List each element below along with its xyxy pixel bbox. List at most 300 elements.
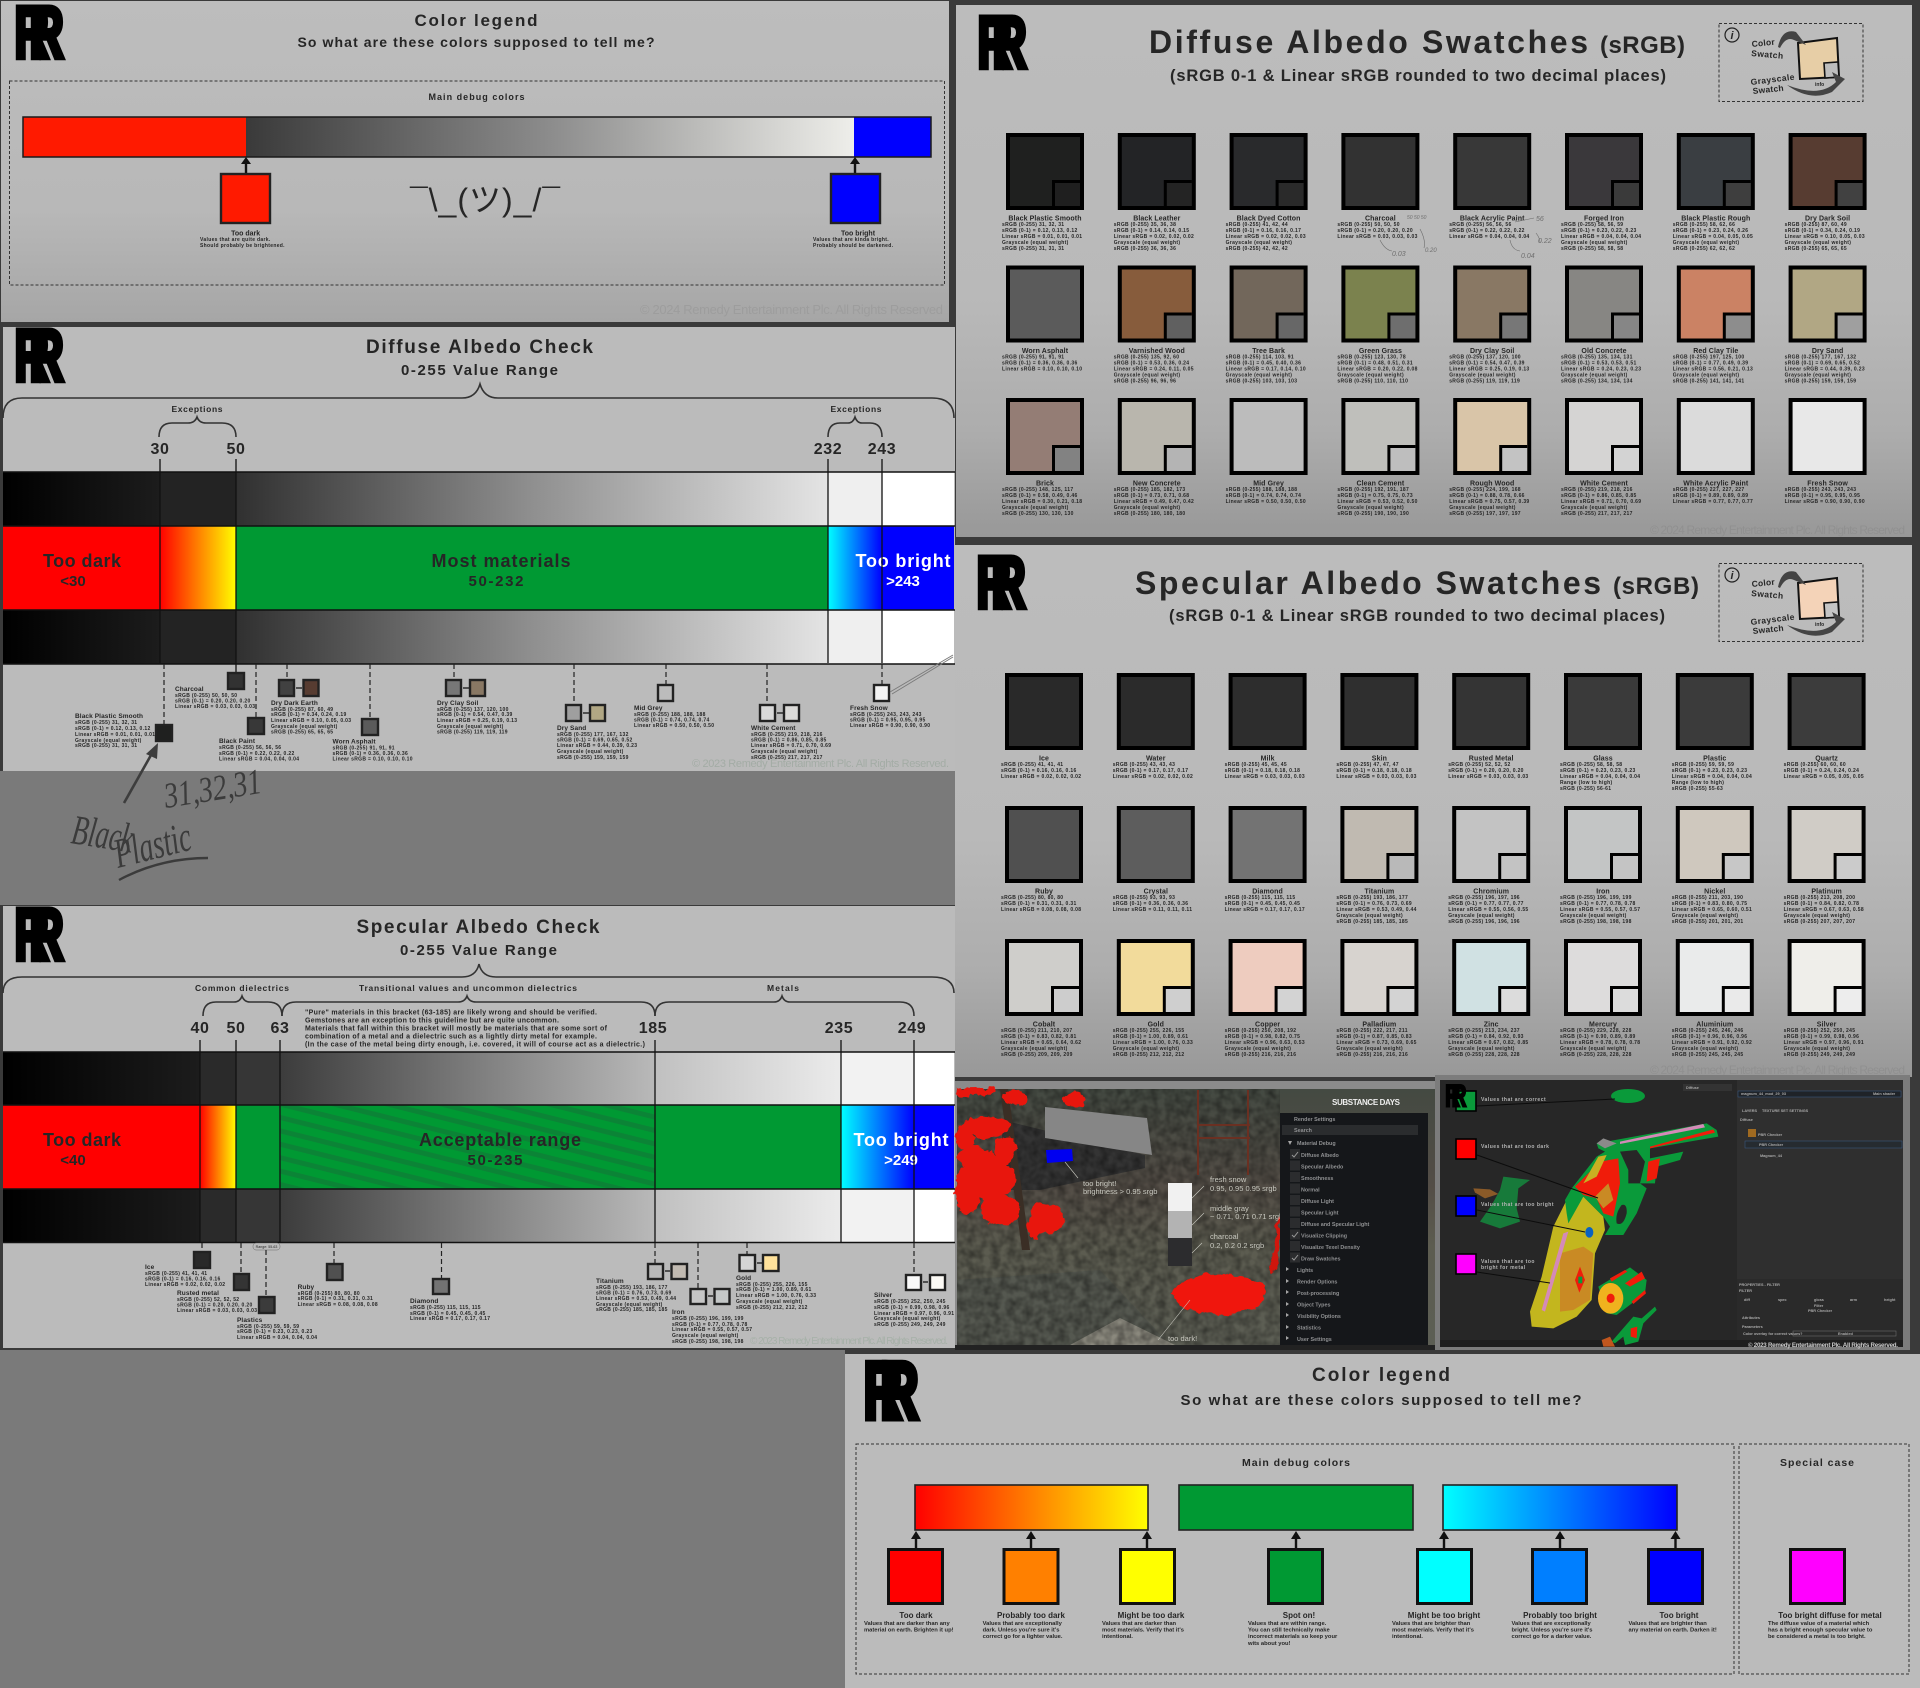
callout: fresh snow: sRGB (0-1) = 0.95, 0.95, 0.95	[850, 717, 926, 723]
callout: silver: Grayscale (equal weight)	[874, 1316, 941, 1322]
threshold numbers: 63	[270, 1020, 290, 1037]
callout: iron: sRGB (0-255) 198, 198, 198	[672, 1339, 744, 1345]
swatch: rough wood: Linear sRGB = 0.75, 0.57, 0.39	[1449, 499, 1530, 505]
handwritten notes on charcoal and acrylic: 0.04	[1521, 253, 1535, 260]
exceptions right: Exceptions	[830, 404, 882, 414]
swatch: fresh snow	[1785, 398, 1867, 505]
callout: white cement: sRGB (0-1) = 0.86, 0.85, 0.85	[751, 738, 827, 744]
arrows	[911, 1531, 1680, 1548]
copyright: © 2023 Remedy Entertainment Plc. All Rights Reserved.	[692, 758, 949, 770]
swatch: green grass: sRGB (0-1) = 0.48, 0.51, 0.31	[1337, 360, 1413, 366]
item: probably too dark: Values that are exceptionally	[983, 1621, 1063, 1627]
swatch: tree bark: Linear sRGB = 0.17, 0.14, 0.10	[1226, 366, 1306, 372]
brand label: SUBSTANCE DAYS	[1332, 1098, 1401, 1107]
swatch: mid grey: sRGB (0-255) 188, 188, 188	[1226, 487, 1297, 493]
swatch: glass: sRGB (0-1) = 0.23, 0.23, 0.23	[1560, 768, 1636, 774]
swatch: ruby: Linear sRGB = 0.08, 0.08, 0.08	[1001, 907, 1081, 913]
swatch: black acrylic paint	[1449, 133, 1531, 240]
swatch: zinc: Zinc	[1484, 1022, 1499, 1028]
swatch: dry sand: sRGB (0-1) = 0.69, 0.65, 0.52	[1785, 360, 1860, 366]
swatch: forged iron: Forged Iron	[1584, 216, 1624, 222]
callout: fresh snow	[850, 655, 953, 729]
callout: fresh snow: Linear sRGB = 0.90, 0.90, 0.90	[850, 723, 930, 729]
item: spot on: wits about you!	[1247, 1641, 1291, 1647]
callout: rusted metal: Linear sRGB = 0.03, 0.03, 0.03	[177, 1308, 257, 1314]
swatch: old concrete: Old Concrete	[1581, 348, 1627, 355]
label: too dark: Too dark	[43, 1130, 122, 1150]
swatch: aluminium	[1672, 939, 1754, 1058]
render settings panel: Lights	[1297, 1268, 1313, 1274]
swatch: varnished wood: sRGB (0-255) 135, 92, 60	[1114, 354, 1179, 360]
swatch: dry dark soil	[1785, 133, 1867, 252]
swatch: old concrete: sRGB (0-255) 134, 134, 134	[1561, 378, 1633, 384]
swatch: ruby: sRGB (0-1) = 0.31, 0.31, 0.31	[1001, 901, 1077, 907]
swatch: too bright	[813, 157, 894, 249]
swatch: black acrylic paint: sRGB (0-255) 56, 56, 56	[1449, 222, 1512, 228]
swatch: black plastic smooth: Grayscale (equal weight)	[1002, 240, 1069, 246]
panel: color legend detailed	[845, 1343, 1920, 1688]
swatch: plastic: Linear sRGB = 0.04, 0.04, 0.04	[1672, 774, 1752, 780]
swatch: black plastic rough: Grayscale (equal weight)	[1673, 240, 1739, 246]
swatch: dry sand: sRGB (0-255) 177, 167, 132	[1785, 354, 1856, 360]
swatch: white cement: sRGB (0-255) 219, 218, 216	[1561, 487, 1633, 493]
swatch: cobalt: sRGB (0-255) 209, 209, 209	[1001, 1052, 1073, 1058]
legend: correct: Values that are correct	[1481, 1097, 1546, 1103]
swatch: rusted metal	[1448, 673, 1530, 780]
swatch: worn asphalt: sRGB (0-255) 91, 91, 91	[1002, 354, 1064, 360]
callout: charcoal: sRGB (0-255) 50, 50, 50	[175, 693, 237, 699]
swatch: brick: sRGB (0-1) = 0.58, 0.49, 0.46	[1002, 493, 1078, 499]
layers panel: TEXTURE SET SETTINGS	[1762, 1109, 1809, 1113]
callout: black plastic smooth: sRGB (0-255) 31, 31, 31	[75, 743, 137, 749]
swatch: quartz: sRGB (0-255) 60, 60, 60	[1784, 762, 1846, 768]
callout: ruby: Linear sRGB = 0.08, 0.08, 0.08	[298, 1302, 378, 1308]
swatch: platinum: sRGB (0-255) 207, 207, 207	[1784, 919, 1855, 925]
swatch: cobalt	[1001, 939, 1083, 1058]
item: spot on: incorrect materials so keep your	[1248, 1634, 1338, 1640]
swatch: black plastic smooth: sRGB (0-255) 31, 32, 31	[1002, 222, 1064, 228]
render settings panel: Diffuse Albedo	[1301, 1153, 1340, 1159]
callout: gold: sRGB (0-255) 212, 212, 212	[736, 1305, 808, 1311]
swatch: skin	[1336, 673, 1418, 780]
swatch: milk: Linear sRGB = 0.03, 0.03, 0.03	[1225, 774, 1305, 780]
swatch: black leather: sRGB (0-255) 35, 36, 38	[1114, 222, 1176, 228]
swatch: forged iron: Linear sRGB = 0.04, 0.04, 0.04	[1561, 234, 1641, 240]
swatch: brick	[1002, 398, 1084, 517]
swatch grid	[1001, 673, 1866, 1058]
red accents	[1575, 1158, 1620, 1217]
render settings panel: Specular Albedo	[1301, 1164, 1344, 1170]
swatch: palladium: sRGB (0-255) 216, 216, 216	[1336, 1052, 1408, 1058]
item: might be too bright: Values that are brighter than	[1392, 1621, 1471, 1627]
swatch: white acrylic paint	[1673, 398, 1755, 505]
top gray ramp	[3, 472, 954, 526]
info box: Swatch	[1752, 83, 1784, 96]
threshold numbers: 50	[226, 441, 246, 458]
callout: diamond: Linear sRGB = 0.17, 0.17, 0.17	[410, 1316, 490, 1322]
swatch: gold: sRGB (0-255) 255, 226, 155	[1113, 1028, 1185, 1034]
callout: dry sand: Linear sRGB = 0.44, 0.39, 0.23	[557, 743, 637, 749]
swatch: silver: sRGB (0-1) = 0.99, 0.98, 0.96	[1784, 1034, 1859, 1040]
render settings panel: Diffuse Light	[1301, 1199, 1334, 1205]
callout: dry clay soil: sRGB (0-1) = 0.54, 0.47, 0.39	[437, 712, 513, 718]
callout: black plastic smooth: Linear sRGB = 0.01, 0.01, 0.01	[75, 732, 155, 738]
swatch: aluminium: sRGB (0-1) = 0.96, 0.96, 0.96	[1672, 1034, 1747, 1040]
callout: charcoal: Linear sRGB = 0.03, 0.03, 0.03	[175, 704, 255, 710]
label: too bright range: >249	[884, 1152, 918, 1169]
swatch: ruby: sRGB (0-255) 80, 80, 80	[1001, 895, 1063, 901]
threshold numbers: 243	[868, 441, 896, 458]
label: too dark range: <30	[60, 573, 86, 590]
callout: black plastic smooth: sRGB (0-255) 31, 32, 31	[75, 720, 137, 726]
callout: dry clay soil	[437, 664, 517, 736]
info box: info	[1815, 82, 1824, 88]
background: gray filler lower left	[0, 771, 955, 905]
swatch: new concrete: New Concrete	[1133, 480, 1181, 488]
callout: mid grey: sRGB (0-255) 188, 188, 188	[634, 712, 706, 718]
callout: plastics	[237, 1243, 317, 1341]
swatch: new concrete: sRGB (0-1) = 0.73, 0.71, 0.68	[1114, 493, 1189, 499]
logo: R	[976, 542, 1011, 625]
dashed box: main	[856, 1444, 1734, 1674]
swatch: milk: Milk	[1261, 756, 1275, 762]
label: too bright: Too bright	[856, 551, 950, 571]
swatch: dry dark soil: Dry Dark Soil	[1805, 216, 1850, 222]
threshold numbers: 232	[814, 441, 842, 458]
item: too dark: material on earth. Brighten it up!	[864, 1628, 954, 1634]
swatch: cobalt: sRGB (0-1) = 0.83, 0.82, 0.81	[1001, 1034, 1077, 1040]
swatch: dry clay soil	[1449, 266, 1531, 384]
swatch: tree bark: sRGB (0-255) 103, 103, 103	[1226, 378, 1297, 384]
swatch: cobalt: Grayscale (equal weight)	[1001, 1046, 1068, 1052]
swatch: too dark: Values that are quite dark.	[200, 237, 271, 243]
callout: plastics: Range: 55-63	[256, 1245, 277, 1249]
info box: Color	[1751, 577, 1776, 589]
subheading: (sRGB 0-1 & Linear sRGB rounded to two decimal places)	[1170, 67, 1666, 85]
layers panel: arm	[1850, 1298, 1858, 1302]
swatch: mid grey: Linear sRGB = 0.50, 0.50, 0.50	[1226, 499, 1306, 505]
heading suffix: (sRGB)	[1600, 32, 1685, 59]
swatch: gold: Grayscale (equal weight)	[1113, 1046, 1179, 1052]
item: probably too bright	[1512, 1550, 1597, 1640]
callout: worn asphalt: Worn Asphalt	[332, 739, 376, 746]
viewport dropdown	[1683, 1084, 1732, 1091]
swatch: green grass: sRGB (0-255) 123, 130, 78	[1337, 354, 1406, 360]
render settings panel: User Settings	[1297, 1337, 1332, 1343]
dark road	[1002, 1120, 1145, 1190]
swatch: silver	[1784, 939, 1866, 1058]
callout: plastics: sRGB (0-255) 59, 59, 59	[237, 1324, 299, 1330]
scene grain	[957, 1089, 1280, 1345]
layers panel: Parameters	[1742, 1325, 1763, 1329]
info box	[1719, 564, 1863, 642]
swatch: milk: sRGB (0-255) 45, 45, 45	[1225, 762, 1287, 768]
swatch: charcoal: sRGB (0-1) = 0.20, 0.20, 0.20	[1337, 228, 1413, 234]
render settings panel: Normal	[1301, 1188, 1320, 1194]
swatch: crystal: sRGB (0-1) = 0.36, 0.36, 0.36	[1113, 901, 1188, 907]
red clipping: foliage	[955, 1087, 1087, 1238]
callout: iron: Grayscale (equal weight)	[672, 1333, 739, 1339]
exceptions left	[159, 404, 236, 437]
ejector rod	[1612, 1307, 1657, 1345]
callout: dry dark earth: sRGB (0-1) = 0.34, 0.24, 0.19	[271, 712, 347, 718]
layers panel	[1737, 1091, 1903, 1340]
swatch: brick: Brick	[1036, 480, 1054, 488]
render settings panel: Post-processing	[1297, 1291, 1339, 1297]
callout: dry clay soil: Linear sRGB = 0.25, 0.19, 0.13	[437, 718, 517, 724]
bar: too dark range	[915, 1485, 1148, 1530]
swatch: quartz: sRGB (0-1) = 0.24, 0.24, 0.24	[1784, 768, 1859, 774]
callout: mid grey: Linear sRGB = 0.50, 0.50, 0.50	[634, 723, 714, 729]
swatch: dry dark soil: sRGB (0-1) = 0.34, 0.24, 0.19	[1785, 228, 1860, 234]
swatch: white acrylic paint: sRGB (0-1) = 0.89, 0.89, 0.89	[1673, 493, 1748, 499]
info box: Swatch	[1752, 623, 1784, 636]
swatch: ice: Linear sRGB = 0.02, 0.02, 0.02	[1001, 774, 1081, 780]
swatch: rusted metal: Rusted Metal	[1469, 756, 1514, 762]
swatch: white cement: Grayscale (equal weight)	[1561, 505, 1628, 511]
swatch: cobalt: sRGB (0-255) 211, 210, 207	[1001, 1028, 1072, 1034]
layers panel: LAYERS	[1742, 1109, 1758, 1113]
render settings panel: Smoothness	[1301, 1176, 1333, 1182]
note text: Gemstones are an exception to this guideline but are quite uncommon.	[305, 1018, 559, 1024]
swatch: charcoal: sRGB (0-255) 50, 50, 50	[1337, 222, 1400, 228]
swatch: black acrylic paint: sRGB (0-1) = 0.22, 0.22, 0.22	[1449, 228, 1525, 234]
logo small: R	[1451, 1078, 1467, 1114]
swatch: chromium: Grayscale (equal weight)	[1448, 913, 1515, 919]
callout: white cement: sRGB (0-255) 219, 218, 216	[751, 732, 823, 738]
logo small: R	[1445, 1078, 1460, 1114]
swatch: clean cement: Linear sRGB = 0.53, 0.52, 0.50	[1337, 499, 1418, 505]
swatch: black acrylic paint: Black Acrylic Paint	[1460, 216, 1525, 222]
render settings panel: Search	[1294, 1128, 1312, 1134]
stray part: hammer	[1480, 1177, 1530, 1228]
item: probably too bright: Probably too bright	[1523, 1611, 1597, 1620]
swatch: dry dark soil: sRGB (0-255) 65, 65, 65	[1785, 246, 1847, 252]
swatch: skin: sRGB (0-1) = 0.18, 0.18, 0.18	[1336, 768, 1412, 774]
swatch: plastic: sRGB (0-1) = 0.23, 0.23, 0.23	[1672, 768, 1747, 774]
scene annotations: brightness > 0.95 srgb	[1083, 1187, 1157, 1196]
swatch: charcoal: Linear sRGB = 0.03, 0.03, 0.03	[1337, 234, 1418, 240]
swatch: black plastic smooth	[1002, 133, 1084, 252]
swatch: green grass: Grayscale (equal weight)	[1337, 372, 1404, 378]
swatch: iron: sRGB (0-1) = 0.77, 0.78, 0.78	[1560, 901, 1636, 907]
swatch: dry clay soil: Grayscale (equal weight)	[1449, 372, 1516, 378]
callout: mid grey: sRGB (0-1) = 0.74, 0.74, 0.74	[634, 717, 710, 723]
scene annotations: middle gray	[1210, 1204, 1249, 1213]
scene annotations	[1065, 1162, 1283, 1343]
note text: combination of a metal and a dielectric such as a lightly dirty metal for example.	[305, 1034, 597, 1040]
item: spot on: Spot on!	[1283, 1611, 1315, 1620]
callout: mid grey	[634, 664, 714, 729]
swatch: fresh snow: Linear sRGB = 0.90, 0.90, 0.90	[1785, 499, 1865, 505]
logo: R	[992, 2, 1027, 85]
big brace	[3, 384, 954, 418]
swatch: green grass: Green Grass	[1359, 348, 1402, 355]
label: most materials range: 50-232	[468, 573, 524, 590]
info box: info	[1815, 622, 1824, 628]
swatch: black leather: sRGB (0-1) = 0.14, 0.14, 0.15	[1114, 228, 1189, 234]
panel: diffuse albedo swatches	[956, 2, 1912, 537]
swatch: forged iron: Grayscale (equal weight)	[1561, 240, 1628, 246]
handwritten notes on charcoal and acrylic	[1380, 215, 1552, 260]
swatch: dry dark soil: sRGB (0-255) 87, 60, 49	[1785, 222, 1847, 228]
gray tarp	[1045, 1107, 1152, 1155]
swatch: black plastic rough: Linear sRGB = 0.04, 0.05, 0.05	[1673, 234, 1753, 240]
callout: white cement: Grayscale (equal weight)	[751, 749, 818, 755]
swatch: worn asphalt	[1002, 266, 1084, 372]
callout: ruby	[298, 1243, 378, 1308]
frame	[1565, 1123, 1718, 1235]
swatch: gold	[1113, 939, 1195, 1058]
swatch: clean cement	[1337, 398, 1419, 517]
swatch: nickel: Nickel	[1704, 888, 1725, 896]
item: spot on: You can still technically make	[1248, 1628, 1331, 1634]
callout: gold: sRGB (0-1) = 1.00, 0.89, 0.61	[736, 1287, 812, 1293]
threshold numbers	[190, 1020, 926, 1037]
scene background	[957, 1089, 1435, 1345]
swatch: black leather	[1114, 133, 1196, 252]
item: might be too dark: Values that are darker than	[1102, 1621, 1177, 1627]
swatch: black plastic rough: sRGB (0-255) 62, 62, 62	[1673, 246, 1735, 252]
panel: scene screenshot	[955, 1081, 1440, 1350]
swatch: varnished wood: Grayscale (equal weight)	[1114, 372, 1180, 378]
swatch: platinum: Grayscale (equal weight)	[1784, 913, 1850, 919]
swatch: mid grey: Mid Grey	[1253, 480, 1284, 488]
swatch: black leather: sRGB (0-255) 36, 36, 36	[1114, 246, 1176, 252]
swatch: varnished wood	[1114, 266, 1196, 384]
subheading: So what are these colors supposed to tell me?	[298, 34, 654, 50]
swatch: plastic: sRGB (0-255) 59, 59, 59	[1672, 762, 1734, 768]
callout: iron: sRGB (0-1) = 0.77, 0.78, 0.78	[672, 1322, 748, 1328]
swatch: diamond: sRGB (0-1) = 0.45, 0.45, 0.45	[1225, 901, 1300, 907]
info box: Grayscale	[1750, 72, 1795, 87]
swatch: ice: sRGB (0-1) = 0.16, 0.16, 0.16	[1001, 768, 1077, 774]
swatch: titanium: Titanium	[1364, 888, 1394, 896]
callout: titanium: Titanium	[596, 1278, 624, 1285]
swatch: white cement: sRGB (0-1) = 0.86, 0.85, 0.85	[1561, 493, 1637, 499]
legend: too bright for metal: Values that are too	[1481, 1259, 1535, 1265]
swatch: palladium	[1336, 939, 1418, 1058]
swatch: green grass: Linear sRGB = 0.20, 0.22, 0.08	[1337, 366, 1418, 372]
swatch: copper: Linear sRGB = 0.96, 0.63, 0.53	[1225, 1040, 1305, 1046]
callout: black plastic smooth: Black Plastic Smooth	[75, 713, 143, 720]
callout: gold: Grayscale (equal weight)	[736, 1299, 803, 1305]
threshold numbers: 50	[226, 1020, 246, 1037]
swatch: water: Linear sRGB = 0.02, 0.02, 0.02	[1113, 774, 1193, 780]
swatch: too dark	[200, 157, 285, 249]
callout: dry clay soil: sRGB (0-255) 119, 119, 119	[437, 730, 508, 736]
swatch: diamond: Diamond	[1252, 888, 1283, 896]
callout: black plastic smooth: Grayscale (equal weight)	[75, 738, 142, 744]
handwritten notes on charcoal and acrylic: 0.20	[1425, 248, 1437, 254]
swatch: white cement	[1561, 398, 1643, 517]
swatch: mid grey	[1226, 398, 1308, 505]
callout: titanium: sRGB (0-1) = 0.76, 0.73, 0.69	[596, 1290, 672, 1296]
swatch: red clay tile: Red Clay Tile	[1693, 348, 1738, 355]
render settings panel: Statistics	[1297, 1326, 1321, 1332]
swatch: platinum: Platinum	[1811, 888, 1842, 896]
heading: Color legend	[414, 11, 538, 30]
swatch: plastic: Plastic	[1703, 756, 1726, 762]
callout: ruby: sRGB (0-255) 80, 80, 80	[298, 1291, 360, 1297]
swatch: silver: sRGB (0-255) 252, 250, 245	[1784, 1028, 1855, 1034]
big brace	[3, 964, 954, 993]
callout: white cement	[751, 664, 831, 761]
callout: black paint: Black Paint	[219, 738, 256, 745]
layers panel: height	[1884, 1298, 1896, 1302]
item: might be too bright: Might be too bright	[1408, 1611, 1481, 1620]
callout: ice: sRGB (0-255) 41, 41, 41	[145, 1271, 207, 1277]
info box: Color	[1751, 37, 1776, 49]
swatch: rough wood: sRGB (0-255) 197, 197, 197	[1449, 511, 1521, 517]
swatch: black dyed cotton: sRGB (0-255) 41, 42, 44	[1226, 222, 1288, 228]
lower rocks	[957, 1270, 1170, 1345]
callout: silver: sRGB (0-255) 249, 249, 249	[874, 1322, 946, 1328]
layers panel: Diffuse	[1740, 1118, 1753, 1122]
threshold numbers: 40	[190, 1020, 210, 1037]
layers panel: Enabled	[1838, 1332, 1853, 1336]
layers panel: gloss	[1814, 1298, 1824, 1302]
heading: Diffuse Albedo Swatches	[1149, 24, 1588, 60]
bar: correct range	[1179, 1485, 1413, 1530]
callout: worn asphalt: sRGB (0-1) = 0.36, 0.36, 0.36	[332, 751, 408, 757]
dashed box	[10, 81, 944, 285]
swatch: old concrete	[1561, 266, 1643, 384]
swatch: platinum: Linear sRGB = 0.67, 0.63, 0.58	[1784, 907, 1864, 913]
swatch: iron: Grayscale (equal weight)	[1560, 913, 1627, 919]
copyright: © 2023 Remedy Entertainment Plc. All Rights Reserved.	[1748, 1342, 1898, 1349]
swatch: varnished wood: sRGB (0-255) 96, 96, 96	[1114, 378, 1176, 384]
swatch: brick: sRGB (0-255) 130, 130, 130	[1002, 511, 1074, 517]
swatch: dry dark soil: Linear sRGB = 0.10, 0.05, 0.03	[1785, 234, 1865, 240]
swatch: nickel: Grayscale (equal weight)	[1672, 913, 1738, 919]
label: main debug colors: Main debug colors	[1242, 1457, 1350, 1469]
swatch: copper	[1225, 939, 1307, 1058]
swatch: black plastic smooth: sRGB (0-255) 31, 31, 31	[1002, 246, 1064, 252]
swatch: iron: sRGB (0-255) 196, 199, 199	[1560, 895, 1632, 901]
legend: correct	[1456, 1091, 1615, 1111]
scene annotations: ~ 0.71, 0.71 0.71 srgb	[1210, 1212, 1283, 1221]
swatch: silver: sRGB (0-255) 249, 249, 249	[1784, 1052, 1855, 1058]
swatch: rough wood: Grayscale (equal weight)	[1449, 505, 1516, 511]
swatch: zinc: Grayscale (equal weight)	[1448, 1046, 1515, 1052]
swatch: quartz: Quartz	[1815, 756, 1838, 762]
swatch: aluminium: Grayscale (equal weight)	[1672, 1046, 1738, 1052]
heading: Specular Albedo Swatches	[1135, 565, 1601, 601]
swatch: green grass: sRGB (0-255) 110, 110, 110	[1337, 378, 1408, 384]
swatch: mercury: Linear sRGB = 0.78, 0.78, 0.78	[1560, 1040, 1640, 1046]
swatch: charcoal	[1337, 133, 1419, 240]
swatch: platinum: sRGB (0-255) 213, 208, 200	[1784, 895, 1855, 901]
swatch: glass: Glass	[1593, 756, 1613, 762]
swatch: nickel: sRGB (0-1) = 0.83, 0.80, 0.75	[1672, 901, 1747, 907]
layers panel: diff	[1744, 1298, 1751, 1302]
swatch: rusted metal: Linear sRGB = 0.03, 0.03, 0.03	[1448, 774, 1529, 780]
callout: dry dark earth: sRGB (0-255) 87, 60, 49	[271, 707, 333, 713]
callout: titanium: Linear sRGB = 0.53, 0.49, 0.44	[596, 1296, 676, 1302]
swatch: quartz: Linear sRGB = 0.05, 0.05, 0.05	[1784, 774, 1864, 780]
info box: i	[1730, 30, 1734, 42]
item: too bright diffuse for metal: Too bright diffuse for metal	[1778, 1611, 1882, 1620]
swatch: titanium: sRGB (0-255) 185, 185, 185	[1336, 919, 1408, 925]
callout: ruby: sRGB (0-1) = 0.31, 0.31, 0.31	[298, 1296, 373, 1302]
swatch: varnished wood: sRGB (0-1) = 0.53, 0.36, 0.24	[1114, 360, 1189, 366]
label: acceptable values: 50-235	[468, 1152, 522, 1169]
swatch: iron: Iron	[1596, 888, 1610, 896]
threshold numbers: 235	[825, 1020, 853, 1037]
swatch: white acrylic paint: Linear sRGB = 0.77, 0.77, 0.77	[1673, 499, 1753, 505]
callout: gold: Linear sRGB = 1.00, 0.76, 0.33	[736, 1293, 816, 1299]
